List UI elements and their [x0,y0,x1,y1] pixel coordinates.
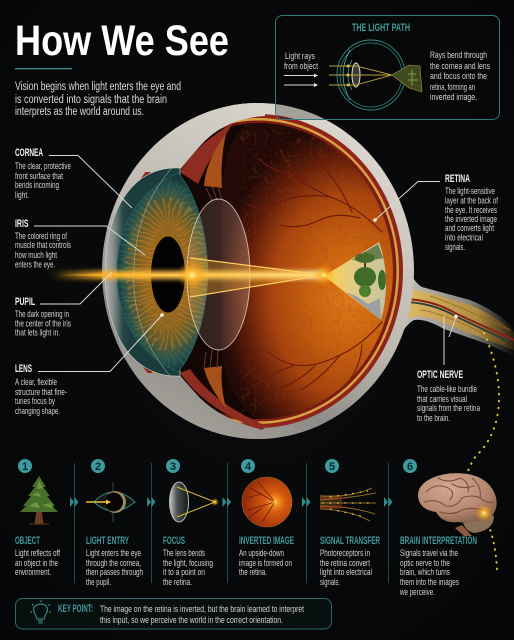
step 5: signal transfer: signals. [320,577,340,587]
step 3: focus: the light, focusing [163,558,213,568]
light path explanation: the cornea and lens [430,61,490,71]
step 4: inverted image: An upside-down [239,548,284,558]
step 3: focus: FOCUS [163,535,185,547]
label: cornea: The clear, protective [15,161,71,171]
step 2: light entry: LIGHT ENTRY [86,535,129,547]
label: cornea: bends incoming [15,180,59,190]
label: lens: LENS [15,363,32,375]
step 3: focus: The lens bends [163,548,205,558]
label: optic nerve: that carries visual [417,394,467,404]
light rays label and arrows: Light rays [285,51,315,61]
light beam [50,258,335,297]
signal path dotted line [464,333,499,575]
retinal blood vessels [250,150,382,392]
label: optic nerve: The cable-like bundle [417,384,477,394]
step 4: inverted image: INVERTED IMAGE [239,535,294,547]
intro text: interprets as the world around us. [15,106,144,118]
callout: key point: this input, so we perceive the world in the correct orientation. [100,615,283,625]
label: cornea: front surface that [15,171,63,181]
step 4: inverted image: the retina. [239,567,267,577]
step 6: brain interpretation: we perceive. [399,587,435,597]
ciliary muscle, upper [180,123,233,200]
label: iris: how much light [15,250,57,260]
step dividers and arrows [70,463,392,583]
lens [187,199,250,350]
label: lens: structure that fine- [15,387,67,397]
cornea [105,168,180,376]
icon: retina disc [242,477,292,527]
step 6: brain interpretation: brain, which turns [400,567,450,577]
step 5: signal transfer: 5 [329,461,335,473]
step 5: signal transfer: light into electrical [320,567,372,577]
step 5: signal transfer [320,459,380,587]
light rays label and arrows: from object [284,61,318,71]
light path explanation: inverted image. [430,92,477,102]
label: pupil: The dark opening in [15,309,69,319]
panel: the light path [276,16,500,120]
intro text [15,81,181,118]
light rays label and arrows [284,51,318,87]
step 5: signal transfer: the retina convert [320,558,370,568]
ciliary muscle, lower [180,350,267,430]
callout: key point [16,598,332,629]
step 3: focus: it to a point on [163,567,205,577]
label: lens: changing shape. [15,406,60,416]
label: lens [15,313,164,416]
callout: key point: The image on the retina is inverted, but the brain learned to interpret [100,604,304,614]
label: optic nerve [417,315,480,423]
label: optic nerve: signals from the retina [417,403,480,413]
callout: key point: KEY POINT: [58,603,93,615]
icon: nerve fibres [320,488,376,521]
label: retina: signals. [445,242,465,252]
step 4: inverted image: 4 [245,461,252,473]
icon: tree [20,476,58,524]
inverted image on retina [324,242,386,320]
step 6: brain interpretation: optic nerve to the [400,558,450,568]
iris [117,173,208,372]
icon: brain [418,473,497,536]
step 1: object: 1 [22,461,28,473]
label: cornea: light. [15,190,29,200]
label: pupil: the center of the iris [15,318,71,328]
label: cornea: CORNEA [15,147,43,159]
step 1: object [15,459,60,577]
retina interior [222,123,393,419]
label: lens: tunes focus by [15,396,55,406]
label: retina: into electrical [445,232,483,242]
label: pupil [15,272,112,338]
icon: light bulb [30,600,51,623]
label: pupil: that lets light in. [15,328,60,338]
step 1: object: Light reflects off [15,548,60,558]
label: iris: The colored ring of [15,231,67,241]
step 1: object: OBJECT [15,535,40,547]
icon: lens focusing rays [170,482,219,522]
light path explanation: Rays bend through [430,50,487,60]
title: How We See [15,17,229,65]
mini eye diagram [329,40,422,110]
light path explanation: and focus onto the [430,71,487,81]
pupil [151,236,185,312]
label: retina: and converts light [445,223,494,233]
step 6: brain interpretation: Signals travel via the [400,548,458,558]
step 4: inverted image: image is formed on [239,558,292,568]
step 3: focus: the retina. [163,577,192,587]
step 3: focus [163,459,219,587]
step 2: light entry: then passes through [86,567,143,577]
intro text: is converted into signals that the brain [15,94,167,106]
label: optic nerve: OPTIC NERVE [417,369,463,381]
label: cornea [15,147,132,208]
step 3: focus: 3 [170,461,176,473]
step 1: object: environment. [15,567,51,577]
cornea highlight [134,168,172,378]
label: iris [15,218,145,270]
step 2: light entry: Light enters the eye [86,548,141,558]
step 6: brain interpretation: them into the images [400,577,459,587]
label: optic nerve: to the brain. [417,413,450,423]
step 4: inverted image [239,459,294,577]
label: iris: muscle that controls [15,240,71,250]
step 2: light entry: through the cornea, [86,558,141,568]
light path explanation [430,50,490,102]
optic nerve [392,255,514,356]
step 1: object: an object in the [15,558,58,568]
step 5: signal transfer: Photoreceptors in [320,548,370,558]
label: iris: enters the eye. [15,260,55,270]
label: lens: A clear, flexible [15,377,57,387]
label: retina [373,173,498,252]
sclera front wall [132,103,265,439]
step 2: light entry: 2 [95,461,101,473]
step 6: brain interpretation [399,459,497,597]
intro text: Vision begins when light enters the eye and [15,81,181,93]
step 5: signal transfer: SIGNAL TRANSFER [320,535,380,547]
step 6: brain interpretation: 6 [407,461,413,473]
label: retina: RETINA [445,173,470,185]
sclera [102,103,414,439]
label: pupil: PUPIL [15,296,35,308]
step 2: light entry [86,459,143,587]
eye cross-section illustration [50,95,514,445]
step 2: light entry: the pupil. [86,577,111,587]
icon: eye with light [86,482,135,522]
panel heading: THE LIGHT PATH [352,22,410,34]
light path explanation: retina, forming an [430,82,475,92]
label: iris: IRIS [15,218,28,230]
